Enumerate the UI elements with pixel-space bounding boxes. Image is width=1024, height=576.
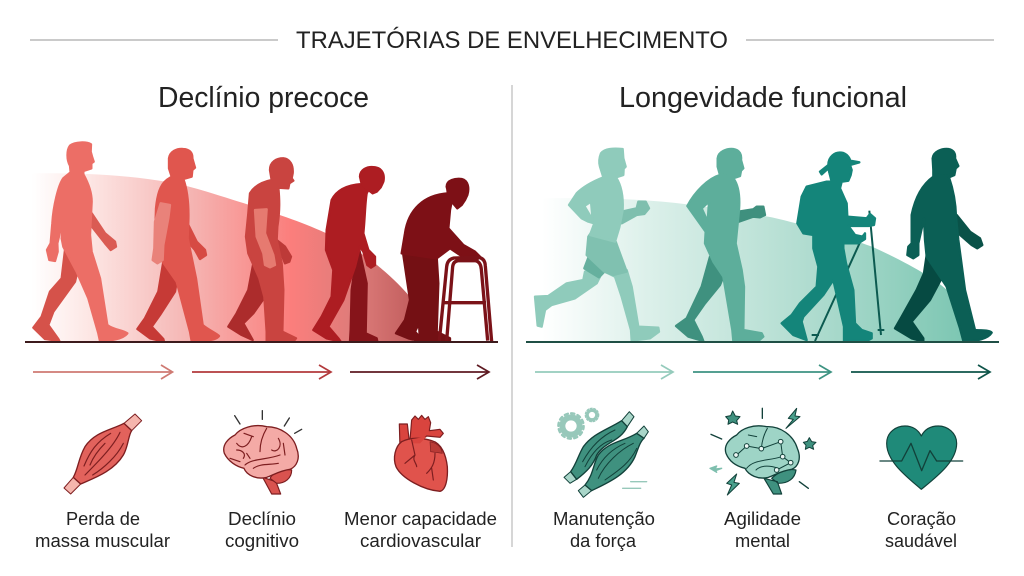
runner: [535, 148, 659, 341]
arrow 2: [693, 365, 831, 379]
icon: muscles with gears: [558, 408, 648, 497]
label: coração saudável: saudável: [885, 531, 957, 551]
ground line: [526, 341, 999, 343]
arrow 2: [192, 365, 331, 379]
heading: longevidade funcional: Longevidade funcional: [619, 82, 907, 114]
background curve: [542, 198, 965, 342]
label: menor capacidade cardiovascular: cardiovascular: [360, 531, 481, 551]
figure 5 with walker: [396, 179, 492, 342]
figure 4: [313, 167, 384, 342]
label: perda de massa muscular: massa muscular: [35, 531, 170, 551]
arrow 1: [535, 365, 673, 379]
panel: declínio precoce: [25, 82, 498, 551]
hiker with backpack and poles: [782, 153, 884, 341]
ground line: [25, 341, 498, 343]
icon: muscle: [64, 414, 142, 494]
icon: agile brain: [710, 408, 816, 495]
figure 1: [33, 142, 127, 341]
icon: healthy heart: [880, 426, 963, 489]
label: agilidade mental: Agilidade: [724, 509, 801, 529]
label: declínio cognitivo: Declínio: [228, 509, 296, 529]
heading: declínio precoce: Declínio precoce: [158, 82, 369, 114]
arrow 3: [350, 365, 489, 379]
figure 2: [137, 149, 219, 342]
figure 3: [228, 158, 296, 342]
label: perda de massa muscular: Perda de: [66, 509, 140, 529]
arrow 3: [851, 365, 990, 379]
icon: heart: [394, 415, 447, 491]
strong walker: [895, 148, 992, 342]
title: TRAJETÓRIAS DE ENVELHECIMENTO: [296, 27, 728, 54]
arrow 1: [33, 365, 172, 379]
label: manutenção da força: da força: [570, 531, 637, 551]
label: coração saudável: Coração: [887, 509, 956, 529]
walker 2: [676, 148, 765, 341]
label: menor capacidade cardiovascular: Menor capacidade: [344, 509, 497, 529]
label: manutenção da força: Manutenção: [553, 509, 655, 529]
panel: longevidade funcional: [526, 82, 999, 551]
label: agilidade mental: mental: [735, 531, 790, 551]
icon: brain: [224, 411, 302, 494]
background curve: [32, 173, 413, 342]
label: declínio cognitivo: cognitivo: [225, 531, 299, 551]
